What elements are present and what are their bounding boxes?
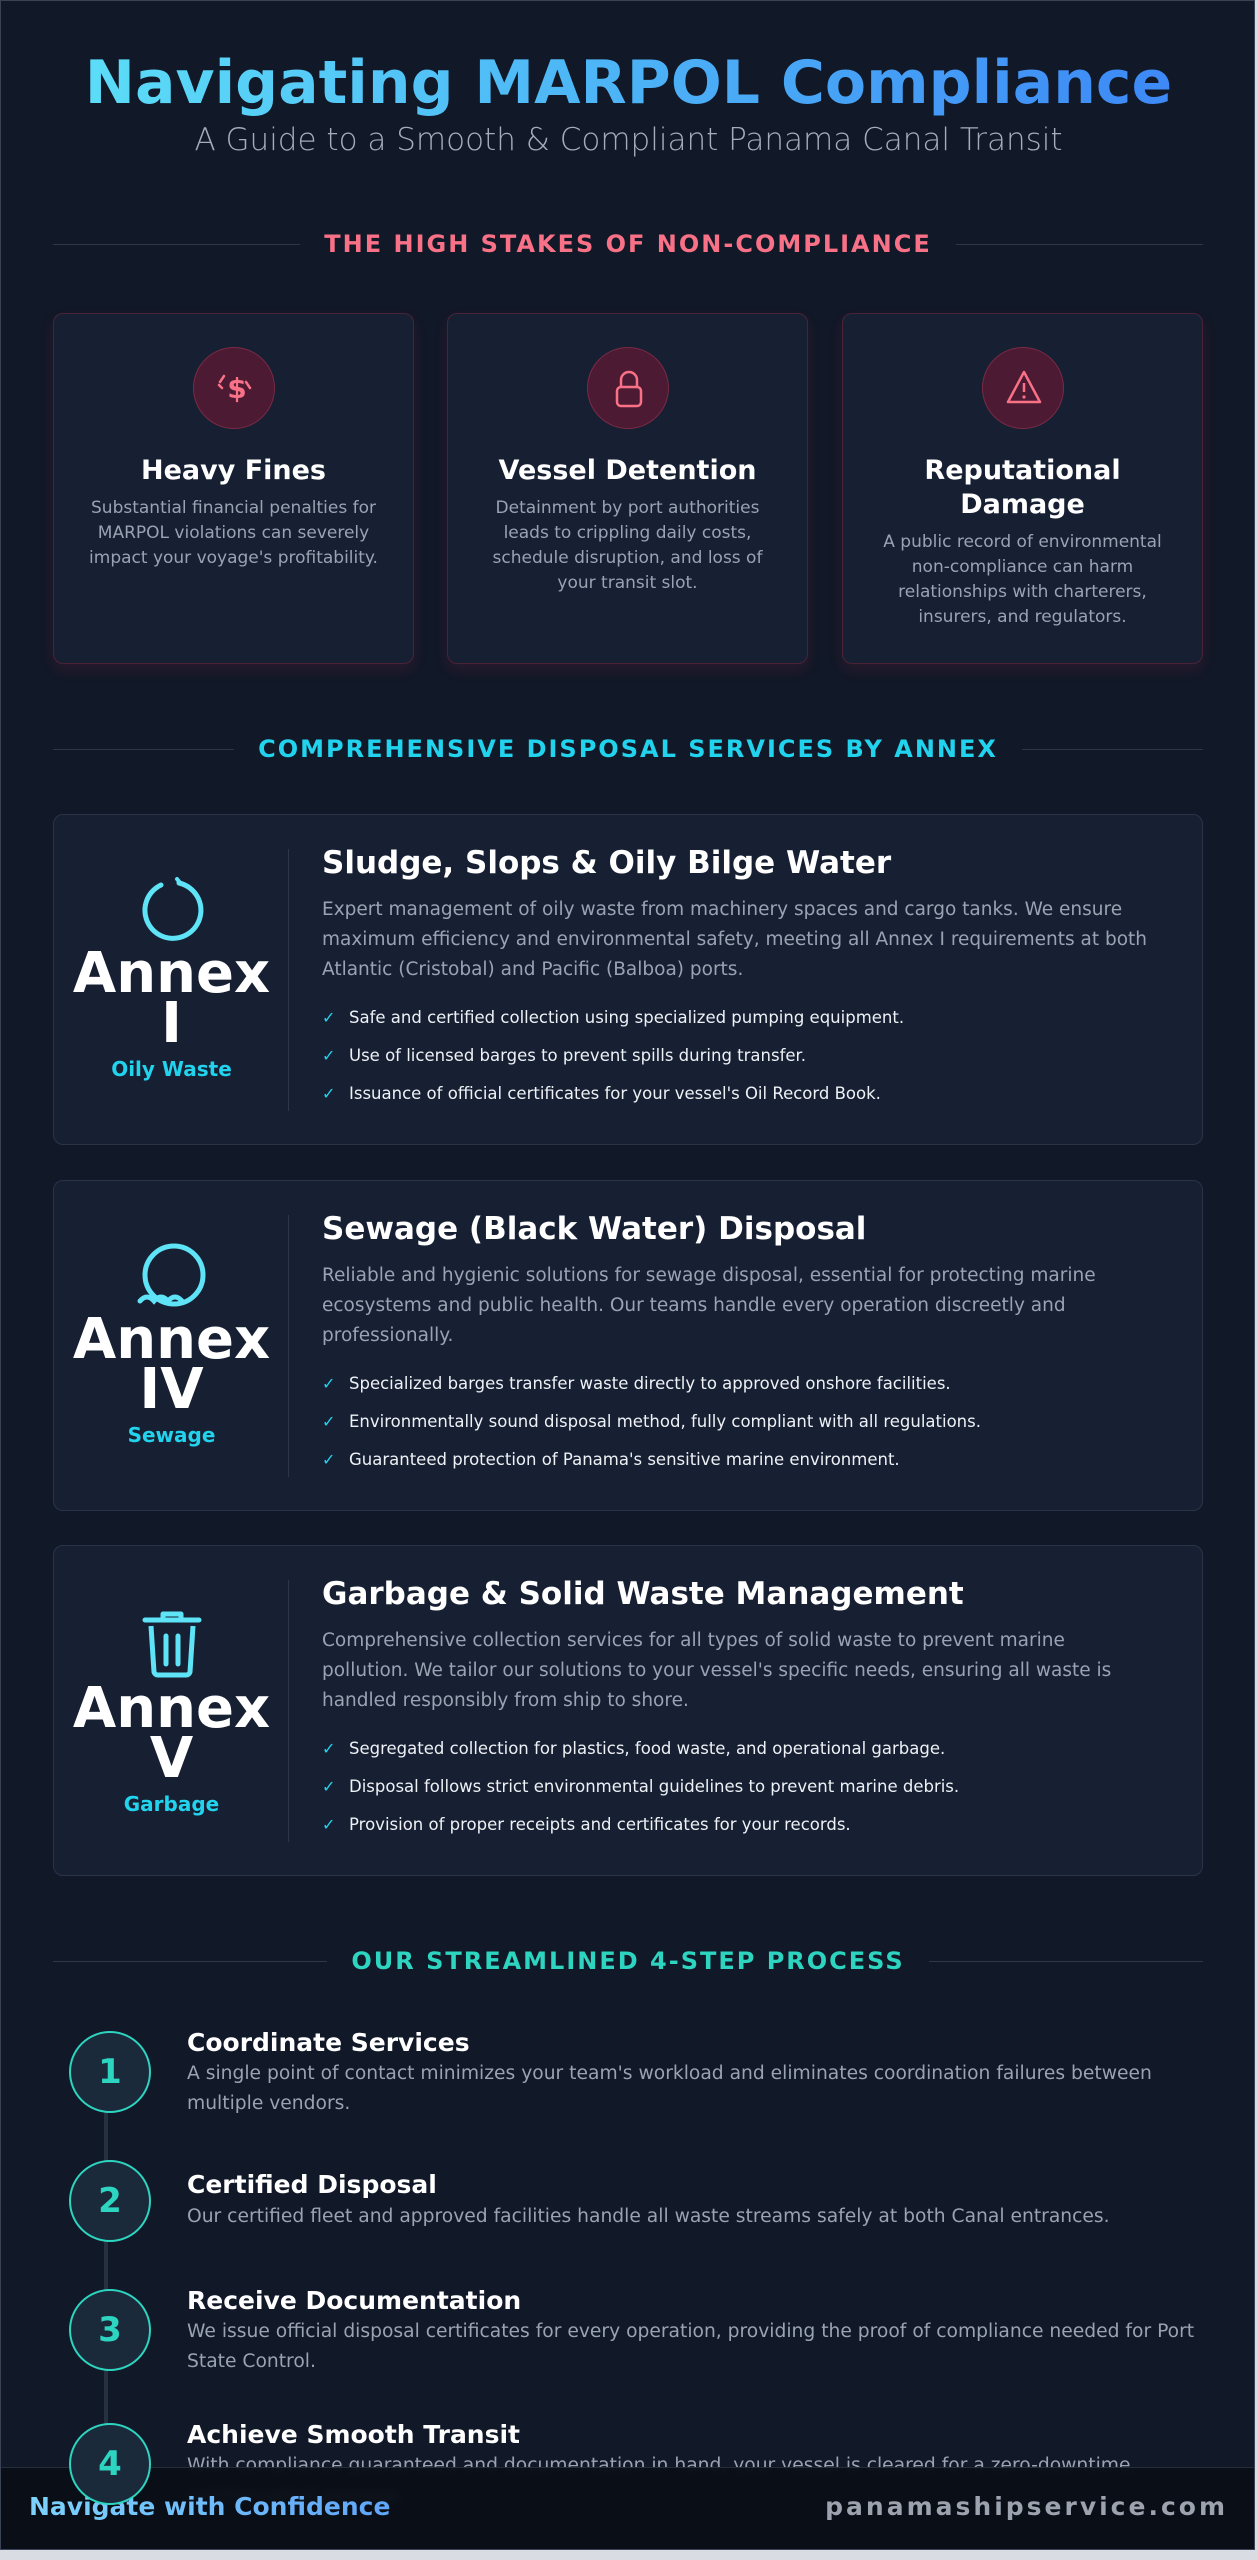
icon: trash can bbox=[142, 1612, 202, 1678]
step 1: 1 bbox=[98, 2052, 122, 2092]
panel: annex V: ✓ bbox=[322, 1739, 335, 1758]
step 4 bbox=[69, 2163, 1136, 2506]
panel: annex I: ✓ bbox=[322, 1008, 335, 1027]
panel: annex I: Expert management of oily waste from machinery spaces and cargo tanks. We ensure maximum efficiency and environmental safety, meeting all Annex I requirements at both Atlantic (Cristobal) and Pacific (Balboa) ports. bbox=[322, 899, 1147, 980]
panel: annex IV: ✓ bbox=[322, 1450, 335, 1469]
section heading: high stakes: THE HIGH STAKES OF NON-COMPLIANCE bbox=[324, 230, 932, 258]
panel: annex I: ✓ bbox=[322, 1084, 335, 1103]
panel: annex V: ✓ bbox=[322, 1777, 335, 1796]
card: vessel detention: Detainment by port authorities leads to crippling daily costs, schedule disruption, and loss of your transit slot. bbox=[493, 498, 762, 593]
panel: annex IV: ✓ bbox=[322, 1412, 335, 1431]
step 2 bbox=[69, 2160, 1110, 2242]
panel: annex V: V bbox=[150, 1726, 193, 1791]
card: reputational damage bbox=[842, 313, 1203, 664]
subtitle: A Guide to a Smooth & Compliant Panama Canal Transit bbox=[194, 122, 1063, 158]
step 3: 3 bbox=[98, 2310, 122, 2350]
step 3: We issue official disposal certificates for every operation, providing the proof of compliance needed for Port State Control. bbox=[187, 2321, 1194, 2372]
panel: annex V: Comprehensive collection services for all types of solid waste to prevent marine pollution. We tailor our solutions to your vessel's specific needs, ensuring all waste is handled responsibly from ship to shore. bbox=[322, 1630, 1111, 1711]
step 3 bbox=[69, 2286, 1194, 2372]
panel: annex V: Disposal follows strict environmental guidelines to prevent marine debris. bbox=[349, 1777, 959, 1796]
icon: sewage bbox=[138, 1244, 206, 1306]
panel: annex IV: ✓ bbox=[322, 1374, 335, 1393]
card: heavy fines bbox=[53, 313, 414, 664]
card: heavy fines: Substantial financial penalties for MARPOL violations can severely impact your voyage's profitability. bbox=[89, 498, 378, 568]
panel: annex V: Garbage & Solid Waste Management bbox=[322, 1576, 964, 1612]
footer tagline: Navigate with Confidence bbox=[29, 2492, 390, 2521]
card: heavy fines: Heavy Fines bbox=[141, 455, 326, 486]
panel: annex I: Annex bbox=[73, 941, 270, 1006]
panel: annex V: Annex bbox=[73, 1676, 270, 1741]
footer website: panamashipservice.com bbox=[825, 2492, 1228, 2521]
card: reputational damage: A public record of environmental non-compliance can harm relationships with charterers, insurers, and regulators. bbox=[883, 532, 1162, 627]
section heading: disposal services: COMPREHENSIVE DISPOSAL SERVICES BY ANNEX bbox=[258, 735, 998, 763]
step 2: Certified Disposal bbox=[187, 2170, 437, 2199]
panel: annex V: ✓ bbox=[322, 1815, 335, 1834]
panel: annex I: ✓ bbox=[322, 1046, 335, 1065]
panel: annex V: Garbage bbox=[124, 1792, 219, 1816]
panel: annex I: Oily Waste bbox=[111, 1057, 232, 1081]
panel: annex IV: Environmentally sound disposal method, fully compliant with all regulations. bbox=[349, 1412, 981, 1431]
panel: annex V bbox=[53, 1545, 1203, 1876]
step 4: 4 bbox=[98, 2444, 122, 2484]
panel: annex V: Provision of proper receipts and certificates for your records. bbox=[349, 1815, 851, 1834]
icon: lock bbox=[587, 347, 669, 429]
icon: money: $ bbox=[227, 372, 247, 405]
panel: annex V: Segregated collection for plastics, food waste, and operational garbage. bbox=[349, 1739, 945, 1758]
card: vessel detention bbox=[447, 313, 808, 664]
title: Navigating MARPOL Compliance bbox=[85, 48, 1172, 118]
panel: annex I: Sludge, Slops & Oily Bilge Water bbox=[322, 845, 891, 881]
panel: annex I: Issuance of official certificates for your vessel's Oil Record Book. bbox=[349, 1084, 881, 1103]
step 3: Receive Documentation bbox=[187, 2286, 521, 2315]
panel: annex IV: Guaranteed protection of Panama's sensitive marine environment. bbox=[349, 1450, 900, 1469]
icon: money bbox=[193, 347, 275, 429]
step 2: 2 bbox=[98, 2181, 122, 2221]
panel: annex I: Use of licensed barges to prevent spills during transfer. bbox=[349, 1046, 806, 1065]
panel: annex IV: Sewage bbox=[128, 1423, 215, 1447]
card: reputational damage: Damage bbox=[960, 489, 1085, 520]
panel: annex I: Safe and certified collection using specialized pumping equipment. bbox=[349, 1008, 904, 1027]
panel: annex I: I bbox=[161, 991, 182, 1056]
icon: oil cycle bbox=[142, 876, 204, 941]
step 4: With compliance guaranteed and documentation in hand, your vessel is cleared for a zero-downtime, uninterrupted passage. bbox=[187, 2455, 1136, 2506]
section heading: process: OUR STREAMLINED 4-STEP PROCESS bbox=[351, 1947, 905, 1975]
step 2: Our certified fleet and approved facilities handle all waste streams safely at both Canal entrances. bbox=[187, 2206, 1110, 2227]
panel: annex I bbox=[53, 814, 1203, 1145]
panel: annex IV: Sewage (Black Water) Disposal bbox=[322, 1211, 866, 1247]
footer bbox=[1, 2467, 1256, 2551]
card: vessel detention: Vessel Detention bbox=[499, 455, 756, 486]
card: reputational damage: Reputational bbox=[924, 455, 1121, 486]
icon: warning bbox=[982, 347, 1064, 429]
panel: annex IV: IV bbox=[139, 1357, 204, 1422]
panel: annex IV bbox=[53, 1180, 1203, 1511]
step 1 bbox=[69, 2028, 1152, 2239]
step 4: Achieve Smooth Transit bbox=[187, 2420, 520, 2449]
panel: annex IV: Specialized barges transfer waste directly to approved onshore facilities. bbox=[349, 1374, 951, 1393]
step 1: A single point of contact minimizes your team's workload and eliminates coordination failures between multiple vendors. bbox=[187, 2063, 1152, 2114]
step 1: Coordinate Services bbox=[187, 2028, 470, 2057]
timeline line bbox=[104, 2076, 108, 2466]
panel: annex IV: Annex bbox=[73, 1307, 270, 1372]
panel: annex IV: Reliable and hygienic solutions for sewage disposal, essential for protecting marine ecosystems and public health. Our teams handle every operation discreetly and professionally. bbox=[322, 1265, 1096, 1346]
